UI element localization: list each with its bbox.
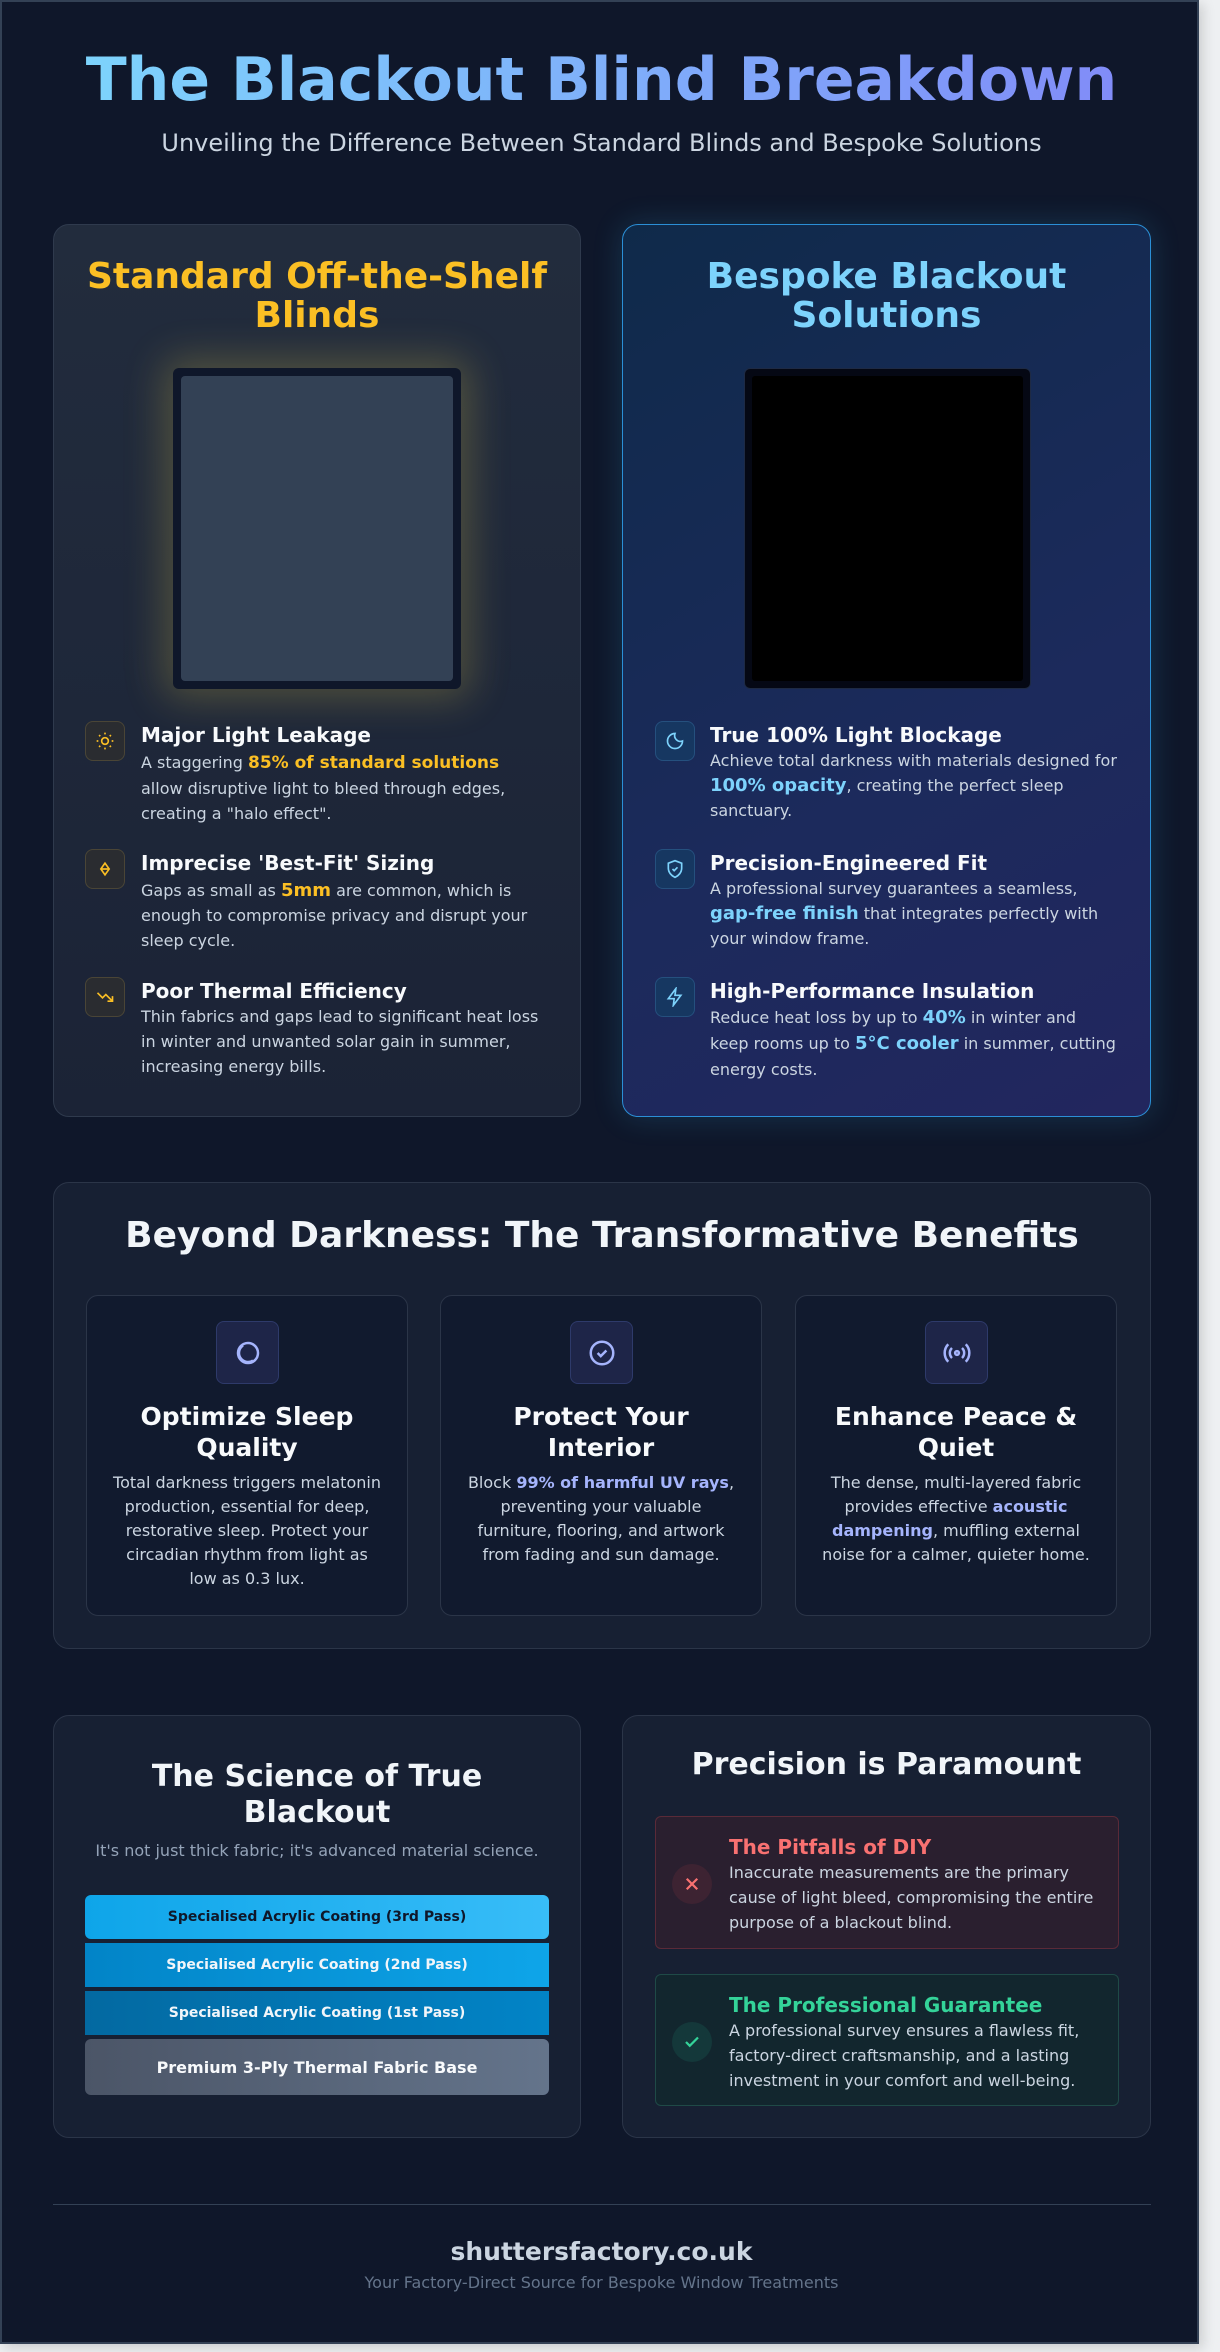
footer: Your Factory-Direct Source for Bespoke Window Treatments [365, 2273, 838, 2292]
heading: bespoke: Bespoke Blackout [707, 256, 1066, 297]
icon: check circle [570, 1321, 633, 1384]
layer stack [85, 1895, 549, 2095]
feature: insulation [655, 977, 1116, 1079]
icon: cross [672, 1864, 712, 1904]
heading: bespoke [707, 256, 1066, 336]
feature: thermal: Thin fabrics and gaps lead to significant heat loss in winter and unwanted solar gain in summer, increasing energy bills. [141, 1007, 538, 1076]
icon: check [672, 2022, 712, 2062]
card: interior: Protect Your [513, 1402, 689, 1431]
feature: sizing: Gaps as small as 5mm are common, which is enough to compromise privacy and disrupt your sleep cycle. [141, 880, 527, 950]
callout: DIY pitfalls: Inaccurate measurements are the primary cause of light bleed, compromising the entire purpose of a blackout blind. [729, 1863, 1093, 1932]
callout: professional guarantee: The Professional Guarantee [729, 1993, 1042, 2017]
panel: precision [622, 1715, 1151, 2138]
panel: science [53, 1715, 581, 2138]
feature: 100% blockage: True 100% Light Blockage [710, 723, 1002, 747]
feature: precision fit: A professional survey guarantees a seamless, gap-free finish that integrates perfectly with your window frame. [710, 879, 1098, 948]
feature: light leakage: A staggering 85% of standard solutions allow disruptive light to bleed through edges, creating a "halo effect". [141, 753, 505, 823]
feature: thermal [85, 977, 538, 1076]
card: quiet [795, 1295, 1117, 1616]
card: sleep: Quality [196, 1433, 298, 1462]
base layer: Premium 3-Ply Thermal Fabric Base [157, 2058, 477, 2076]
feature: light leakage [85, 721, 505, 823]
feature: precision fit [655, 849, 1098, 948]
feature: 100% blockage: Achieve total darkness with materials designed for 100% opacity, creating the perfect sleep sanctuary. [710, 751, 1117, 820]
feature: insulation: High-Performance Insulation [710, 979, 1034, 1003]
layer 1: Specialised Acrylic Coating (1st Pass) [169, 2005, 465, 2021]
feature: thermal: Poor Thermal Efficiency [141, 979, 407, 1003]
title: The Blackout Blind Breakdown [86, 45, 1117, 115]
subtitle: Unveiling the Difference Between Standard Blinds and Bespoke Solutions [161, 129, 1042, 157]
card: quiet: Quiet [918, 1433, 994, 1462]
layer 2 [85, 1943, 549, 1987]
callout: DIY pitfalls: The Pitfalls of DIY [729, 1835, 931, 1859]
icon: sleep [216, 1321, 279, 1384]
card: quiet: The dense, multi-layered fabric provides effective acoustic dampening, muffling external noise for a calmer, quieter home. [822, 1473, 1090, 1564]
feature: 100% blockage [655, 721, 1117, 820]
heading: standard: Standard Off-the-Shelf [87, 256, 547, 297]
layer 3 [85, 1895, 549, 1939]
heading: science: Blackout [244, 1795, 390, 1830]
heading: benefits: Beyond Darkness: The Transformative Benefits [125, 1215, 1079, 1256]
feature: sizing: Imprecise 'Best-Fit' Sizing [141, 851, 434, 875]
card: sleep [86, 1295, 408, 1616]
heading: science [152, 1759, 482, 1830]
card: interior [440, 1295, 762, 1616]
window: blackout [744, 368, 1031, 689]
base layer [85, 2039, 549, 2095]
card: sleep: Total darkness triggers melatonin production, essential for deep, restorative sleep. Protect your circadian rhythm from light as low as 0.3 lux. [113, 1473, 381, 1588]
icon: shield [655, 849, 695, 889]
icon: bolt [655, 977, 695, 1017]
panel: benefits [53, 1182, 1151, 1649]
icon: sun [85, 721, 125, 761]
callout: DIY pitfalls [655, 1816, 1119, 1949]
window: light leak [173, 368, 461, 689]
card: quiet: Enhance Peace & [835, 1402, 1077, 1431]
feature: insulation: keep rooms up to 5°C cooler in summer, cutting energy costs. [710, 1033, 1116, 1079]
layer 1 [85, 1991, 549, 2035]
icon: sound [925, 1321, 988, 1384]
feature: precision fit: Precision-Engineered Fit [710, 851, 987, 875]
icon: sizing [85, 849, 125, 889]
footer [364, 2237, 838, 2292]
heading: standard: Blinds [255, 295, 379, 336]
feature: light leakage: Major Light Leakage [141, 723, 371, 747]
card: interior: Block 99% of harmful UV rays, preventing your valuable furniture, flooring, and artwork from fading and sun damage. [468, 1473, 734, 1564]
layer 2: Specialised Acrylic Coating (2nd Pass) [166, 1957, 468, 1973]
card: sleep: Optimize Sleep [141, 1402, 353, 1431]
callout: professional guarantee: A professional survey ensures a flawless fit, factory-direct craftsmanship, and a lasting investment in your comfort and well-being. [729, 2021, 1079, 2090]
card: interior: Interior [548, 1433, 654, 1462]
heading: precision: Precision is Paramount [692, 1747, 1081, 1782]
footer: shuttersfactory.co.uk [450, 2237, 752, 2266]
heading: science: The Science of True [152, 1759, 482, 1794]
heading: bespoke: Solutions [792, 295, 981, 336]
layer 3: Specialised Acrylic Coating (3rd Pass) [168, 1909, 466, 1925]
subtitle: science: It's not just thick fabric; it's advanced material science. [95, 1841, 539, 1860]
panel: standard blinds [53, 224, 581, 1117]
heading: standard [87, 256, 548, 336]
callout: professional guarantee [655, 1974, 1119, 2106]
feature: sizing [85, 849, 528, 950]
panel: bespoke blinds [622, 224, 1151, 1117]
icon: moon [655, 721, 695, 761]
feature: insulation: Reduce heat loss by up to 40% in winter and [710, 1007, 1076, 1028]
icon: trend down [85, 977, 125, 1017]
